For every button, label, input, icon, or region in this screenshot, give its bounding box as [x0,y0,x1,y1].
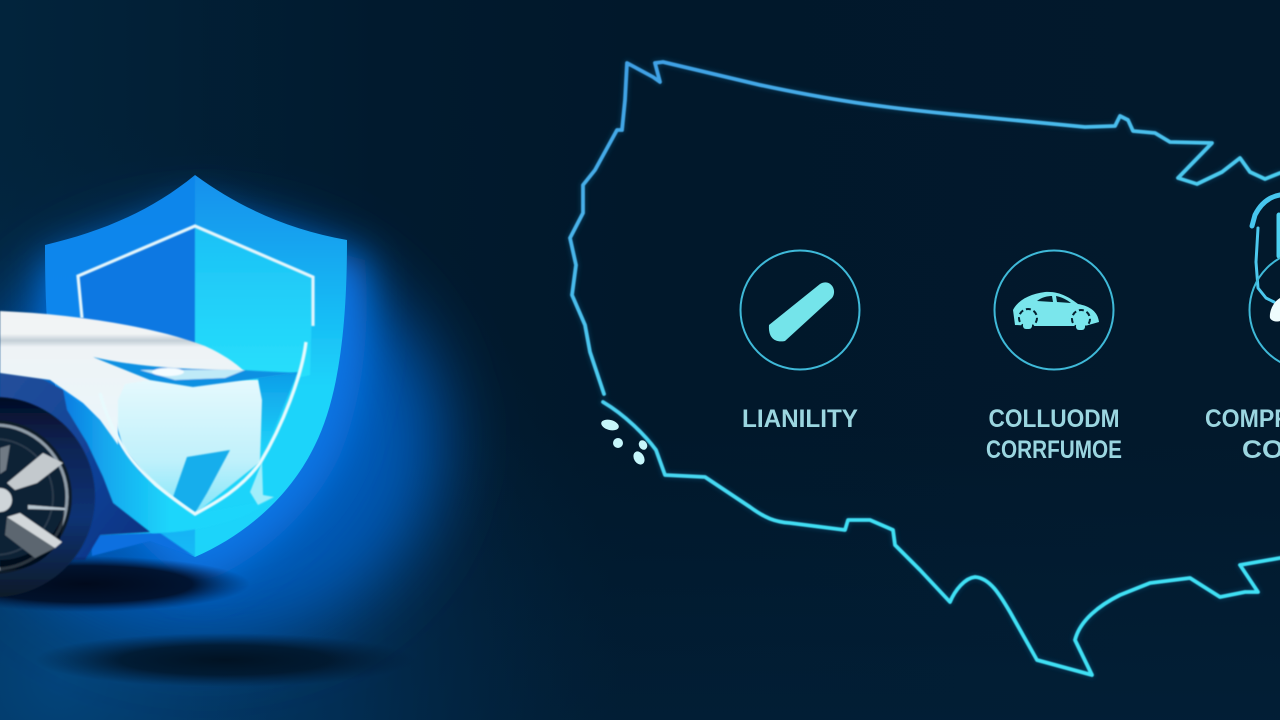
car: headlight slash [93,357,298,387]
map: outline [570,62,1280,675]
icon: car [1013,292,1099,330]
icon: collision circle [994,250,1114,370]
shield with car [0,170,367,612]
background corner blue [0,0,700,720]
map: glow [570,62,1280,675]
coverage: comprehensive [1205,250,1280,464]
map: Great Lakes [1252,195,1280,302]
car: upper body [0,311,245,445]
icon: liability bar [769,282,834,341]
coverage: liability [740,250,860,433]
car: pale strip [250,462,274,505]
shield: white outline upper [78,226,313,326]
car: side window inside shield [258,372,298,458]
label: coverage: CORRFUMOE [986,436,1122,464]
icon: comprehensive glyph [1270,298,1280,322]
map of the United States [570,62,1280,675]
car: pale body [103,378,262,514]
icon: liability circle [740,250,860,370]
car: wheel arch [0,373,150,560]
shield: outer glow [45,205,367,585]
car: ground shadow [0,556,250,612]
floor shadow [35,633,415,687]
icon: comprehensive circle [1250,250,1280,370]
background glow behind shield [0,235,440,645]
coverage: collision [986,250,1122,464]
label: liability: LIANILITY [742,405,858,433]
car: wheel [0,397,95,597]
shield: body [40,170,350,565]
map: Channel Islands [600,418,649,467]
car: cyan cut-out [173,450,230,513]
car: lower translucent panel [60,388,272,535]
shield: white outline lower [100,342,306,514]
bright blue patch under car [90,533,195,557]
label: collision: COLLUODM [988,405,1120,433]
